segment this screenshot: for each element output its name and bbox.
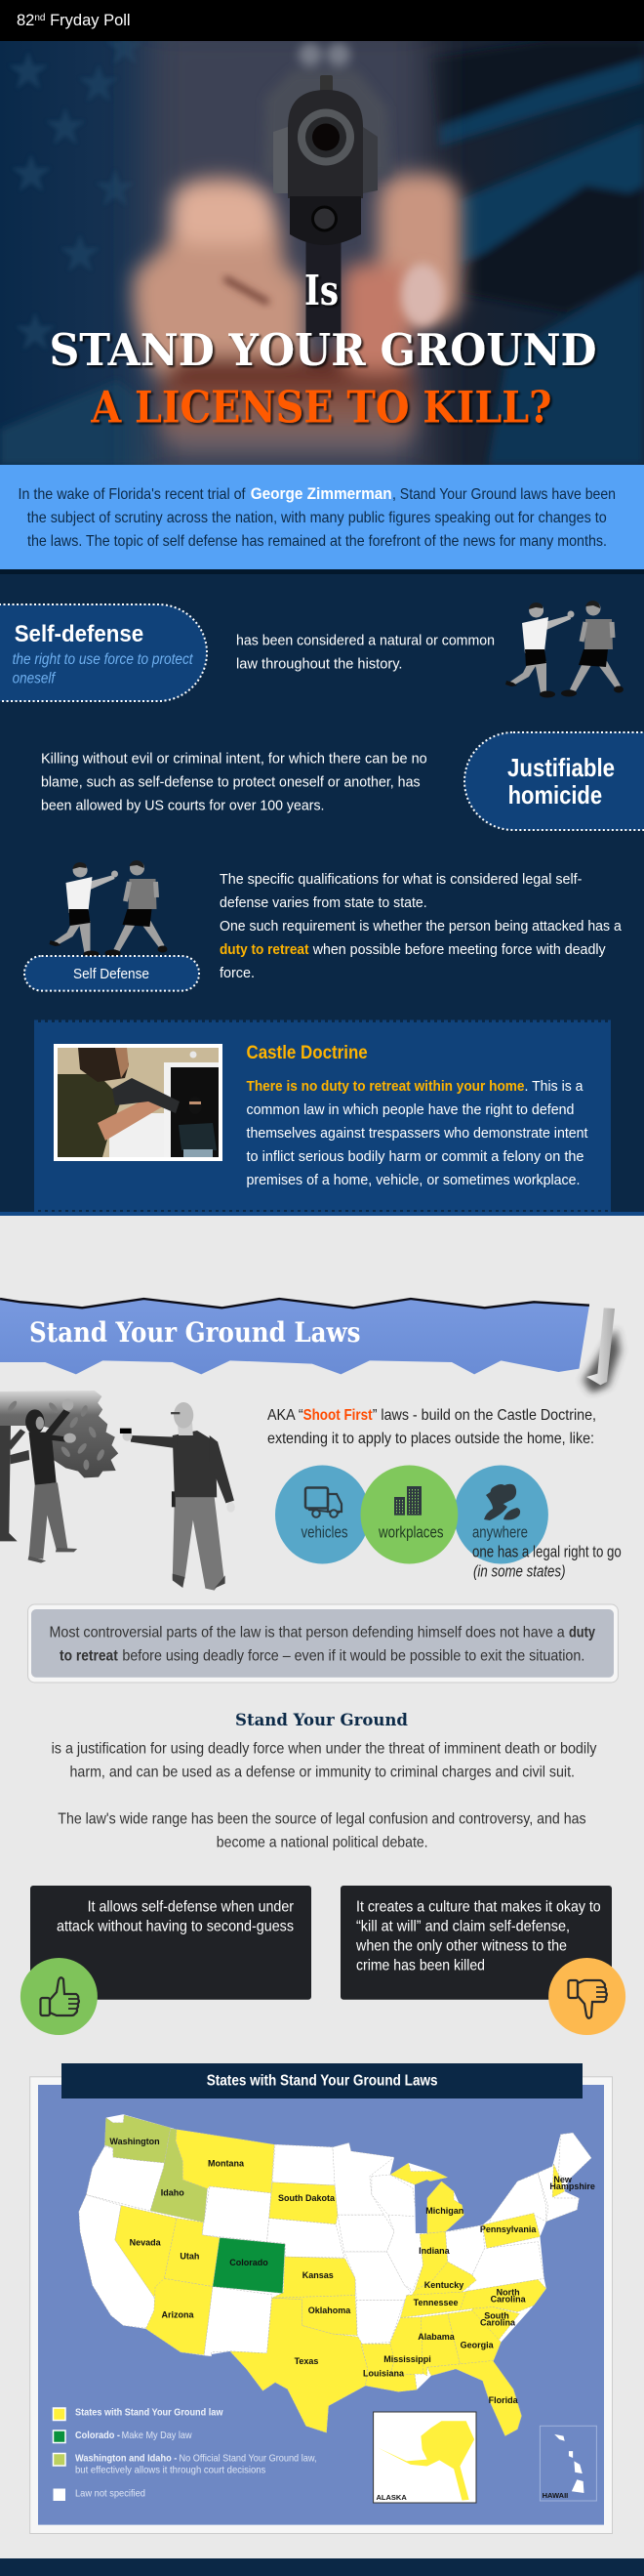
state labels: South Dakota: [278, 2193, 336, 2203]
justifiable homicide description: Killing without evil or criminal intent, for which there can be no: [41, 751, 427, 768]
inset: Alaska: [374, 2412, 476, 2503]
shirt: [146, 20, 429, 488]
self-defense description: has been considered a natural or common: [236, 633, 495, 648]
state labels: Florida: [489, 2395, 519, 2405]
justifiable homicide description: been allowed by US courts for over 100 years.: [41, 797, 324, 813]
hand: [133, 174, 461, 454]
justifiable homicide description: [41, 751, 427, 813]
icon: thumbs down: [548, 1958, 625, 2035]
state labels: Carolina: [480, 2317, 516, 2327]
intro panel: , Stand Your Ground laws have been: [392, 486, 616, 503]
panel: castle doctrine: themselves against trespassers who demonstrate intent: [246, 1125, 588, 1142]
circle: workplaces: workplaces: [378, 1522, 443, 1541]
intro panel: [0, 465, 644, 574]
self-defense description: [236, 633, 495, 673]
callout: controversial part: Most controversial parts of the law is that person defending himself does not have a: [49, 1625, 565, 1641]
intro panel: George Zimmerman: [251, 484, 392, 503]
duty to retreat text: defense varies from state to state.: [220, 894, 427, 911]
state labels: Kentucky: [424, 2280, 463, 2290]
panel: argument against: [341, 1886, 625, 2035]
inset: Alaska: ALASKA: [377, 2493, 407, 2502]
callout: controversial part: [28, 1604, 618, 1683]
title: A LICENSE TO KILL?: [91, 383, 551, 434]
self-defense pill: [0, 604, 207, 701]
state labels: Texas: [295, 2356, 318, 2366]
legend: No Official Stand Your Ground law,: [180, 2453, 316, 2465]
header bar: nd: [34, 13, 45, 23]
icon: thumbs up: [20, 1958, 98, 2035]
circles: vehicles, workplaces, anywhere: (in some states): [473, 1561, 566, 1580]
legend: Make My Day law: [122, 2430, 192, 2441]
legend: Colorado -: [75, 2430, 120, 2441]
justifiable homicide pill: Justifiable: [507, 753, 615, 782]
justifiable homicide pill: [464, 732, 644, 830]
icon: fighters with self defense label: Self Defense: [73, 966, 149, 982]
flag stripes: [0, 41, 644, 465]
shoot first text: ” laws - build on the Castle Doctrine,: [373, 1407, 596, 1424]
state labels: [109, 2137, 595, 2405]
state labels: Montana: [208, 2159, 245, 2169]
panel: argument against: It creates a culture that makes it okay to: [356, 1898, 601, 1915]
state labels: Utah: [180, 2252, 199, 2262]
hero image: gun pointed at viewer: [0, 20, 644, 488]
state labels: Louisiana: [363, 2369, 405, 2379]
panel: castle doctrine: premises of a home, vehicle, or sometimes workplace.: [246, 1172, 580, 1188]
circle: vehicles: [275, 1465, 370, 1564]
justifiable homicide pill: homicide: [508, 780, 602, 810]
circle: anywhere: anywhere: [472, 1522, 528, 1541]
state labels: Kansas: [302, 2270, 334, 2280]
map of US states: [79, 2114, 591, 2436]
footer band: [0, 2558, 644, 2576]
banner: stand your ground laws: [0, 1299, 621, 1393]
state labels: North: [497, 2287, 520, 2297]
duty to retreat text: The specific qualifications for what is considered legal self-: [220, 871, 582, 888]
callout: controversial part: to retreat: [60, 1648, 118, 1665]
panel: argument for: attack without having to second-guess: [57, 1918, 294, 1934]
legend: States with Stand Your Ground law: [75, 2406, 223, 2418]
panel: argument for: It allows self-defense when under: [88, 1898, 295, 1915]
legend: [53, 2406, 316, 2501]
icon: two fighters: [505, 601, 624, 697]
circle: vehicles: vehicles: [301, 1522, 347, 1541]
circle: anywhere: [454, 1465, 548, 1564]
state labels: Mississippi: [383, 2354, 431, 2364]
legend: but effectively allows it through court decisions: [75, 2465, 265, 2476]
justifiable homicide description: blame, such as self-defense to protect oneself or another, has: [41, 774, 421, 791]
panel: argument against: crime has been killed: [356, 1958, 485, 1974]
panel: castle doctrine: . This is a: [525, 1078, 584, 1095]
shoot first text: Shoot First: [303, 1407, 373, 1424]
callout: controversial part: before using deadly force – even if it would be possible to exit the situation.: [122, 1648, 584, 1665]
state labels: Idaho: [161, 2188, 184, 2198]
panel: castle doctrine: There is no duty to retreat within your home: [246, 1078, 525, 1095]
panel: argument against: when the only other witness to the: [355, 1938, 567, 1955]
stand your ground explanation: become a national political debate.: [217, 1835, 428, 1851]
legend: Law not specified: [75, 2487, 145, 2499]
stand your ground explanation: harm, and can be used as a defense or immunity to criminal charges and civil suit.: [70, 1765, 575, 1781]
duty to retreat text: duty to retreat: [220, 941, 308, 958]
pistol: [263, 43, 390, 337]
state labels: Michigan: [425, 2206, 463, 2216]
map heading: [61, 2063, 583, 2098]
navy section background: [0, 574, 644, 1212]
self-defense pill: Self-defense: [15, 621, 143, 647]
state labels: Arizona: [161, 2310, 194, 2320]
shoot first text: extending it to apply to places outside the home, like:: [267, 1431, 594, 1447]
photo: armed homeowner and intruder: [54, 1044, 222, 1161]
panel: castle doctrine: to inflict serious bodily harm or commit a felony on the: [246, 1148, 584, 1165]
map panel: states with stand your ground laws: [30, 2063, 612, 2533]
illustration: shooter and robber by a tree: [0, 1391, 235, 1591]
stand your ground explanation: The law's wide range has been the source of legal confusion and controversy, and has: [58, 1811, 586, 1828]
state labels: New: [553, 2175, 573, 2184]
stand your ground explanation: is a justification for using deadly force when under the threat of imminent death or bodily: [52, 1741, 597, 1758]
title: STAND YOUR GROUND: [49, 325, 597, 376]
panel: castle doctrine: Castle Doctrine: [246, 1043, 368, 1063]
intro panel: In the wake of Florida's recent trial of: [18, 486, 246, 503]
inset: Hawaii: HAWAII: [543, 2491, 568, 2500]
stand your ground explanation: [52, 1711, 597, 1851]
header bar: 82: [17, 12, 34, 29]
state labels: Georgia: [461, 2341, 495, 2350]
shoot first text: AKA “: [267, 1407, 303, 1424]
state labels: Carolina: [491, 2294, 527, 2304]
state labels: Nevada: [130, 2238, 162, 2248]
duty to retreat text: [220, 871, 622, 981]
callout: controversial part: duty: [569, 1625, 595, 1641]
state labels: South: [484, 2310, 509, 2320]
icon: fighters with self defense label: [24, 860, 199, 991]
header bar: [0, 0, 644, 41]
duty to retreat text: when possible before meeting force with deadly: [312, 941, 606, 958]
stand your ground explanation: Stand Your Ground: [235, 1711, 408, 1730]
panel: castle doctrine: [34, 1021, 611, 1211]
state labels: Oklahoma: [308, 2306, 351, 2315]
state labels: Colorado: [229, 2258, 268, 2267]
self-defense pill: oneself: [13, 670, 57, 687]
state labels: Hampshire: [549, 2181, 595, 2191]
map heading: States with Stand Your Ground Laws: [207, 2073, 438, 2090]
circles: vehicles, workplaces, anywhere: [275, 1465, 622, 1580]
panel: argument against: “kill at will” and claim self-defense,: [356, 1918, 570, 1934]
inset: Hawaii: [540, 2426, 596, 2501]
panel: argument for: [20, 1886, 311, 2035]
state labels: Alabama: [418, 2332, 456, 2342]
legend: Washington and Idaho -: [75, 2453, 178, 2465]
header bar: Fryday Poll: [45, 12, 131, 29]
circle: workplaces: [361, 1465, 458, 1564]
state labels: Pennsylvania: [480, 2224, 537, 2234]
panel: castle doctrine: common law in which people have the right to defend: [246, 1101, 574, 1118]
duty to retreat text: One such requirement is whether the person being attacked has a: [220, 918, 622, 935]
flag stars: [13, 41, 137, 347]
self-defense pill: the right to use force to protect: [13, 651, 193, 668]
title: Is: [304, 267, 339, 314]
duty to retreat text: force.: [220, 965, 255, 981]
title: [49, 267, 597, 434]
state labels: Indiana: [419, 2246, 451, 2256]
shoot first text: [267, 1407, 596, 1447]
self-defense description: law throughout the history.: [236, 656, 402, 673]
state labels: Washington: [109, 2137, 160, 2146]
banner: stand your ground laws: Stand Your Ground Laws: [29, 1316, 361, 1349]
state labels: Tennessee: [414, 2298, 459, 2307]
